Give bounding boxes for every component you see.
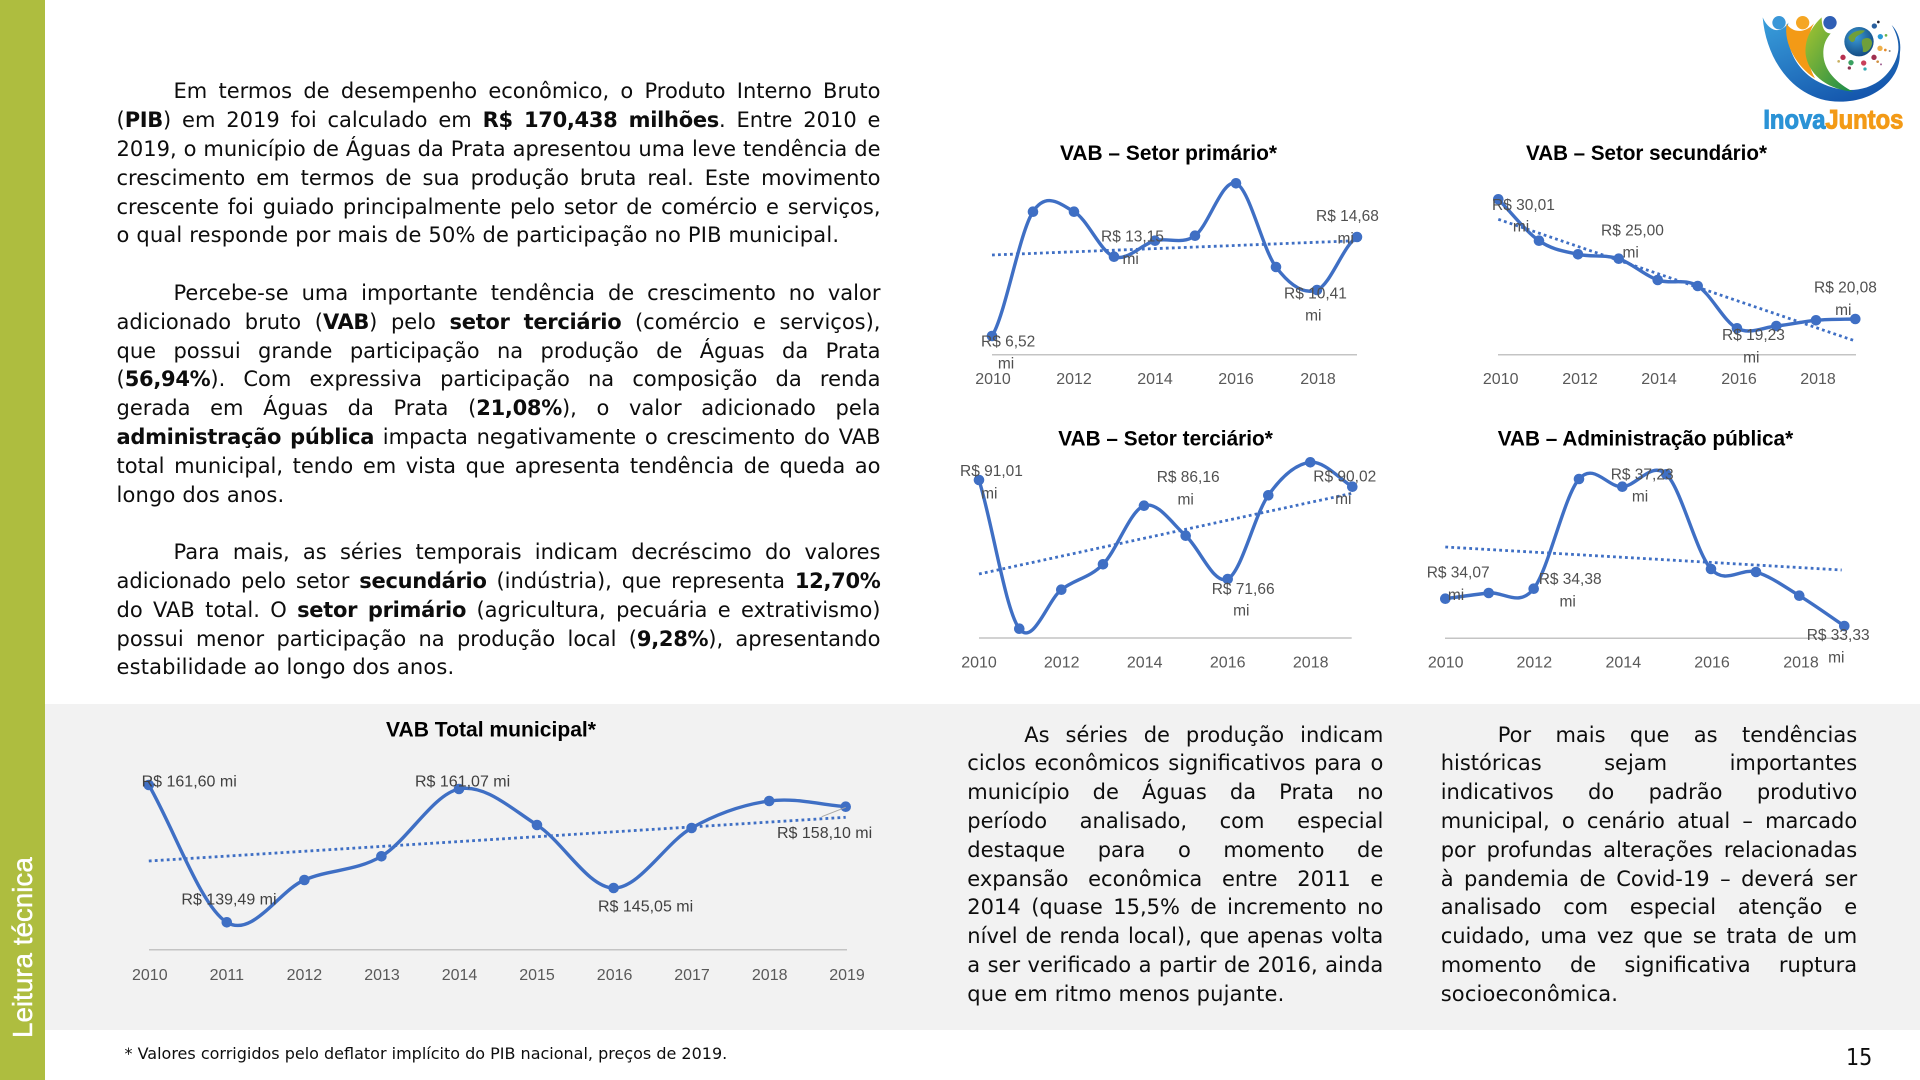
text block: economic performance analysis: administração pública impacta negativamente o crescimento do VAB xyxy=(116,425,880,449)
trend line xyxy=(979,493,1352,574)
data labels: R$ 14,68 xyxy=(1316,208,1379,225)
data labels: R$ 10,41 xyxy=(1284,285,1347,302)
logo heads xyxy=(1772,16,1837,29)
year axis labels: 2015 xyxy=(519,967,555,984)
text block: economic performance analysis: longo dos anos. xyxy=(116,483,284,507)
data labels xyxy=(142,774,872,916)
data labels: mi xyxy=(1560,594,1576,611)
text block: production series commentary: nível de renda local), que apenas volta xyxy=(967,924,1383,948)
data labels xyxy=(981,208,1379,372)
year axis labels: 2018 xyxy=(752,967,788,984)
year axis labels: 2014 xyxy=(1606,654,1641,672)
text block: production series commentary: período analisado, com especial xyxy=(967,809,1383,833)
text block: economic performance analysis: (56,94%). Com expressiva participação na composição da renda xyxy=(116,367,880,391)
text block: economic performance analysis: crescente foi guiado principalmente pelo setor de comércio e serviços, xyxy=(116,195,880,219)
data labels: R$ 6,52 xyxy=(981,334,1035,351)
data line xyxy=(992,183,1357,336)
text block: covid-19 commentary: cuidado, uma vez que se trata de um xyxy=(1441,924,1857,948)
axis baseline xyxy=(1498,354,1856,356)
text block: production series commentary: expansão econômica entre 2011 e xyxy=(967,867,1383,891)
logo wordmark: InovaJuntos xyxy=(1763,104,1903,134)
trend line xyxy=(1498,219,1855,341)
text block: economic performance analysis: crescimento em termos de sua produção bruta real. Este movimento xyxy=(116,166,880,190)
chart: VAB administração pública xyxy=(1427,428,1870,672)
year axis labels: 2014 xyxy=(1641,371,1677,388)
year axis labels: 2012 xyxy=(287,967,322,984)
data labels: mi xyxy=(1233,603,1249,620)
year axis labels: 2018 xyxy=(1300,371,1336,388)
text block: production series commentary: município de Águas da Prata no xyxy=(967,780,1383,804)
chart: VAB setor secundário xyxy=(1483,142,1877,388)
data labels: R$ 139,49 mi xyxy=(181,892,277,908)
text block: economic performance analysis: adicionado pelo setor secundário (indústria), que representa 12,70% xyxy=(116,569,881,593)
text block: production series commentary: ciclos econômicos significativos para o xyxy=(967,751,1383,775)
year axis labels: 2012 xyxy=(1056,371,1092,388)
data labels: R$ 34,07 xyxy=(1427,565,1490,582)
year axis labels xyxy=(132,967,865,984)
data labels: mi xyxy=(1632,489,1648,506)
data labels: R$ 145,05 mi xyxy=(598,898,693,916)
text block: production series commentary: As séries de produção indicam xyxy=(1024,723,1383,747)
year axis labels: 2016 xyxy=(597,967,632,984)
year axis labels: 2010 xyxy=(975,371,1011,388)
data labels xyxy=(1492,197,1877,367)
data line xyxy=(1445,470,1844,626)
axis baseline xyxy=(979,637,1352,639)
text block: covid-19 commentary xyxy=(1441,723,1858,1006)
year axis labels: 2016 xyxy=(1210,654,1246,672)
text block: covid-19 commentary: à pandemia de Covid-19 – deverá ser xyxy=(1441,867,1857,891)
text block: production series commentary: 2014 (quase 15,5% de incremento no xyxy=(967,895,1383,919)
text block: covid-19 commentary: municipal, o cenário atual – marcado xyxy=(1441,809,1857,833)
year axis labels xyxy=(1483,371,1836,388)
logo swoosh: green figure xyxy=(1805,17,1853,92)
year axis labels: 2018 xyxy=(1800,371,1836,388)
page number: 15 xyxy=(1846,1045,1872,1071)
text block: economic performance analysis: estabilidade ao longo dos anos. xyxy=(116,655,454,679)
footnote: * Valores corrigidos pelo deflator implícito do PIB nacional, preços de 2019. xyxy=(124,1044,727,1063)
year axis labels: 2010 xyxy=(132,967,168,984)
text block: production series commentary xyxy=(967,723,1383,1006)
chart title: VAB – Setor secundário* xyxy=(1526,142,1768,165)
logo right crescent xyxy=(1875,25,1900,85)
year axis labels: 2018 xyxy=(1783,654,1819,672)
data labels: R$ 25,00 xyxy=(1601,223,1664,240)
trend line xyxy=(149,817,846,861)
year axis labels: 2019 xyxy=(829,967,865,984)
text block: covid-19 commentary: históricas sejam importantes xyxy=(1441,751,1857,775)
data line xyxy=(979,462,1352,633)
year axis labels xyxy=(961,654,1329,672)
data labels: mi xyxy=(1335,491,1351,508)
text block: production series commentary: que em ritmo menos pujante. xyxy=(967,982,1284,1006)
chart title: VAB – Setor primário* xyxy=(1060,142,1278,165)
text block: economic performance analysis: Em termos de desempenho econômico, o Produto Interno Bruto xyxy=(174,79,880,103)
data labels: R$ 90,02 xyxy=(1313,469,1376,486)
data labels: mi xyxy=(1338,230,1354,247)
year axis labels: 2013 xyxy=(364,967,400,984)
logo: InovaJuntos xyxy=(1762,16,1903,134)
data labels: R$ 13,15 xyxy=(1101,229,1164,246)
year axis labels: 2016 xyxy=(1694,654,1730,672)
year axis labels: 2012 xyxy=(1044,654,1080,672)
axis baseline xyxy=(1445,637,1844,639)
text block: economic performance analysis: gerada em Águas da Prata (21,08%), o valor adicionado pela xyxy=(116,396,880,420)
side bar label: Leitura técnica xyxy=(6,857,38,1038)
text block: economic performance analysis: o qual responde por mais de 50% de participação no PIB municipal. xyxy=(116,223,839,247)
text block: economic performance analysis: 2019, o município de Águas da Prata apresentou uma leve tendência de xyxy=(116,137,880,161)
data labels: R$ 91,01 xyxy=(960,463,1023,480)
data markers xyxy=(974,457,1358,634)
text block: economic performance analysis: que possui grande participação na produção de Águas da Prata xyxy=(116,339,880,363)
chart: VAB total municipal xyxy=(132,719,872,984)
data labels: R$ 158,10 mi xyxy=(777,825,872,842)
data labels: mi xyxy=(1448,587,1464,604)
text block: economic performance analysis: Para mais, as séries temporais indicam decréscimo do valores xyxy=(174,540,880,564)
text block: economic performance analysis: do VAB total. O setor primário (agricultura, pecuária e extrativismo) xyxy=(116,598,880,622)
data labels: mi xyxy=(998,355,1014,372)
text block: production series commentary: destaque para o momento de xyxy=(967,838,1383,862)
logo globe xyxy=(1844,27,1874,56)
data labels: mi xyxy=(1178,491,1194,508)
year axis labels: 2010 xyxy=(1428,654,1464,672)
year axis labels: 2012 xyxy=(1562,371,1598,388)
year axis labels: 2016 xyxy=(1218,371,1254,388)
text block: economic performance analysis: Percebe-se uma importante tendência de crescimento no valor xyxy=(174,281,880,305)
year axis labels: 2010 xyxy=(961,654,997,672)
text block: economic performance analysis: possui menor participação na produção local (9,28%), apresentando xyxy=(116,627,880,651)
text block: covid-19 commentary: socioeconômica. xyxy=(1441,982,1618,1006)
year axis labels: 2017 xyxy=(674,967,710,984)
data labels: mi xyxy=(1743,350,1759,367)
chart: VAB setor terciário xyxy=(960,428,1376,672)
year axis labels xyxy=(1428,654,1819,672)
data markers xyxy=(1493,194,1861,334)
data line xyxy=(1498,199,1855,331)
year axis labels xyxy=(975,371,1336,388)
label leader line xyxy=(822,807,846,817)
trend line xyxy=(992,241,1357,255)
year axis labels: 2012 xyxy=(1517,654,1552,672)
panel: gray lower band xyxy=(45,704,1920,1030)
year axis labels: 2010 xyxy=(1483,371,1519,388)
data labels: mi xyxy=(1828,649,1844,666)
text block: covid-19 commentary: indicativos do padrão produtivo xyxy=(1441,780,1857,804)
text block: economic performance analysis: (PIB) em 2019 foi calculado em R$ 170,438 milhões. Entre 2010 e xyxy=(116,108,880,132)
text block: production series commentary: a ser verificado a partir de 2016, ainda xyxy=(967,953,1383,977)
chart: VAB setor primário xyxy=(975,142,1379,388)
year axis labels: 2016 xyxy=(1721,371,1757,388)
data labels: R$ 34,38 xyxy=(1539,571,1602,588)
data labels xyxy=(1427,466,1870,666)
text block: economic performance analysis xyxy=(116,79,881,679)
data line xyxy=(149,785,846,926)
trend line xyxy=(1445,547,1842,570)
axis baseline xyxy=(992,354,1357,356)
data markers xyxy=(1440,469,1850,631)
data labels xyxy=(960,463,1376,620)
text block: economic performance analysis: total municipal, tendo em vista que apresenta tendência de queda ao xyxy=(116,454,880,478)
year axis labels: 2011 xyxy=(210,967,244,984)
chart title: VAB – Setor terciário* xyxy=(1058,428,1274,451)
logo swoosh: orange figure xyxy=(1786,23,1815,78)
text block: covid-19 commentary: Por mais que as tendências xyxy=(1498,723,1857,747)
text block: covid-19 commentary: analisado com especial atenção e xyxy=(1441,895,1857,919)
chart title: VAB Total municipal* xyxy=(386,719,597,742)
year axis labels: 2014 xyxy=(442,967,477,984)
logo swoosh: blue figure xyxy=(1763,17,1900,102)
year axis labels: 2018 xyxy=(1293,654,1329,672)
data labels: mi xyxy=(1123,251,1139,268)
data labels: mi xyxy=(1513,219,1529,236)
data labels: R$ 161,07 mi xyxy=(415,774,510,790)
data labels: R$ 20,08 xyxy=(1814,279,1877,296)
axis baseline xyxy=(149,949,847,951)
year axis labels: 2014 xyxy=(1137,371,1173,388)
data labels: R$ 161,60 mi xyxy=(142,774,237,790)
data labels: R$ 37,23 xyxy=(1611,466,1674,483)
data labels: mi xyxy=(1835,302,1851,319)
data labels: R$ 33,33 xyxy=(1807,627,1870,644)
panel: green side bar xyxy=(0,0,45,1080)
data labels: mi xyxy=(981,485,997,502)
logo dots xyxy=(1837,21,1891,71)
year axis labels: 2014 xyxy=(1127,654,1163,672)
chart title: VAB – Administração pública* xyxy=(1498,428,1794,451)
data markers xyxy=(987,178,1362,341)
data labels: mi xyxy=(1623,245,1639,262)
data labels: R$ 30,01 xyxy=(1492,197,1555,214)
text block: economic performance analysis: adicionado bruto (VAB) pelo setor terciário (comércio e serviços), xyxy=(116,310,880,334)
text block: covid-19 commentary: por profundas alterações relacionadas xyxy=(1441,838,1857,862)
data labels: R$ 19,23 xyxy=(1722,327,1785,344)
text block: covid-19 commentary: momento de significativa ruptura xyxy=(1441,953,1857,977)
data labels: R$ 86,16 xyxy=(1157,469,1220,486)
data labels: mi xyxy=(1305,308,1321,325)
data markers xyxy=(144,780,851,928)
data labels: R$ 71,66 xyxy=(1212,581,1275,598)
